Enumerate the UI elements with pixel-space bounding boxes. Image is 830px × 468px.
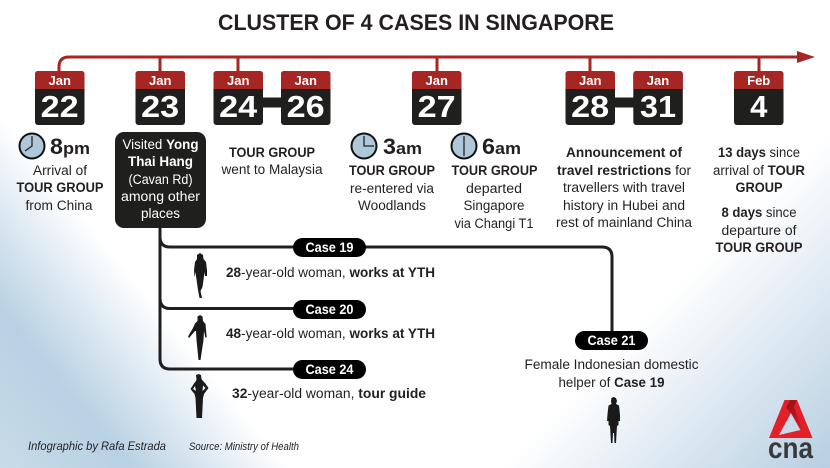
callout: Yong Thai Hang visit: places <box>141 206 180 221</box>
text: departed via Changi T1 <box>452 163 538 231</box>
date range: Jan 28 to 31: Jan <box>647 73 669 88</box>
date: Feb 4 <box>734 71 784 125</box>
text: departed via Changi T1: via Changi T1 <box>454 216 534 231</box>
text: travel restrictions announcement: travellers with travel <box>563 180 685 195</box>
icon: woman silhouette case 21 <box>607 397 620 443</box>
text: case 21 description: helper of Case 19 <box>558 375 664 390</box>
icon: woman silhouette case 24 <box>190 374 208 418</box>
callout: Yong Thai Hang visit: among other <box>121 189 201 204</box>
date: Jan 23 <box>136 71 185 125</box>
text: travel restrictions announcement: Announcement of <box>566 145 683 160</box>
date range: Jan 24 to 26 <box>214 71 330 125</box>
text: re-entered via Woodlands: re-entered via <box>350 181 434 196</box>
connector lines to cases <box>160 228 612 369</box>
text: arrival of tour group: from China <box>26 198 93 213</box>
date range: Jan 28 to 31 <box>566 71 683 125</box>
date range: Jan 28 to 31: 28 <box>571 89 609 124</box>
timeline arrow <box>59 51 815 71</box>
date range: Jan 24 to 26: Jan <box>227 73 249 88</box>
date: Jan 22: Jan <box>48 73 71 88</box>
icon: woman silhouette case 19 <box>194 253 207 298</box>
icon: clock 6am <box>452 134 476 158</box>
logo: CNA <box>768 400 813 465</box>
date range: Jan 24 to 26: Jan <box>294 73 317 88</box>
text: went to Malaysia: went to Malaysia <box>220 162 323 177</box>
text: re-entered via Woodlands <box>349 163 435 213</box>
text: days since arrival and departure: departure of <box>722 223 797 238</box>
label: Case 19: Case 19 <box>306 240 354 255</box>
text: went to Malaysia: TOUR GROUP <box>229 145 315 160</box>
date range: Jan 24 to 26: 26 <box>287 89 325 124</box>
date: Jan 22 <box>35 71 84 125</box>
text: went to Malaysia <box>220 145 323 177</box>
time: 6am: 6am <box>482 134 521 159</box>
text: days since arrival and departure: 8 days since <box>722 205 796 220</box>
label: Case 24: Case 24 <box>306 362 354 377</box>
label: Case 21 <box>575 331 648 350</box>
text: arrival of tour group <box>16 163 104 213</box>
text: days since arrival and departure: arrival of TOUR <box>713 163 805 178</box>
text: travel restrictions announcement <box>556 145 692 230</box>
callout: Yong Thai Hang visit: Visited Yong <box>122 137 198 152</box>
text: case 21 description <box>524 357 699 390</box>
text: arrival of tour group: TOUR GROUP <box>16 180 104 195</box>
callout: Yong Thai Hang visit: Thai Hang <box>128 154 193 169</box>
text: arrival of tour group: Arrival of <box>33 163 87 178</box>
date: Jan 27: 27 <box>418 89 456 124</box>
text: departed via Changi T1: TOUR GROUP <box>452 163 538 178</box>
callout: Yong Thai Hang visit: (Cavan Rd) <box>128 172 192 187</box>
date: Jan 27 <box>412 71 462 125</box>
text: travel restrictions announcement: rest of mainland China <box>556 215 692 230</box>
text: re-entered via Woodlands: TOUR GROUP <box>349 163 435 178</box>
label: Case 20 <box>293 300 366 319</box>
date: Feb 4: Feb <box>747 73 770 88</box>
label: Case 19 <box>293 238 366 257</box>
text: travel restrictions announcement: travel restrictions for <box>557 163 691 178</box>
text: case 24 description: 32-year-old woman, tour guide <box>232 386 426 401</box>
icon: clock 8pm <box>20 134 44 158</box>
label: Case 24 <box>293 360 366 379</box>
text: case 19 description: 28-year-old woman, works at YTH <box>226 265 435 280</box>
label: Case 21: Case 21 <box>588 333 636 348</box>
text: days since arrival and departure: TOUR GROUP <box>716 240 802 255</box>
date: Feb 4: 4 <box>750 89 768 124</box>
text: days since arrival and departure: 13 days since <box>718 145 800 160</box>
title: CLUSTER OF 4 CASES IN SINGAPORE <box>218 10 614 35</box>
credit: source: Source: Ministry of Health <box>189 441 299 453</box>
callout: Yong Thai Hang visit <box>115 132 206 228</box>
time: 3am: 3am <box>383 134 422 159</box>
icon: clock 3am <box>352 134 376 158</box>
text: re-entered via Woodlands: Woodlands <box>358 198 426 213</box>
date range: Jan 24 to 26: 24 <box>219 89 258 124</box>
logo: CNA: cna <box>768 432 813 465</box>
date: Jan 23: Jan <box>149 73 171 88</box>
text: case 20 description: 48-year-old woman, works at YTH <box>226 326 435 341</box>
date: Jan 27: Jan <box>425 73 448 88</box>
text: days since arrival and departure: GROUP <box>736 180 782 195</box>
time: 8pm: 8pm <box>50 134 90 159</box>
text: case 21 description: Female Indonesian domestic <box>524 357 699 372</box>
icon: woman silhouette case 20 <box>188 315 207 360</box>
label: Case 20: Case 20 <box>306 302 354 317</box>
date range: Jan 28 to 31: Jan <box>579 73 601 88</box>
text: departed via Changi T1: Singapore <box>464 198 524 213</box>
text: departed via Changi T1: departed <box>466 181 522 196</box>
text: days since arrival and departure <box>713 145 805 255</box>
date range: Jan 28 to 31: 31 <box>640 89 676 124</box>
date: Jan 23: 23 <box>141 89 179 124</box>
credit: infographic author: Infographic by Rafa Estrada <box>28 441 166 453</box>
date: Jan 22: 22 <box>41 89 79 124</box>
text: travel restrictions announcement: history in Hubei and <box>563 198 685 213</box>
